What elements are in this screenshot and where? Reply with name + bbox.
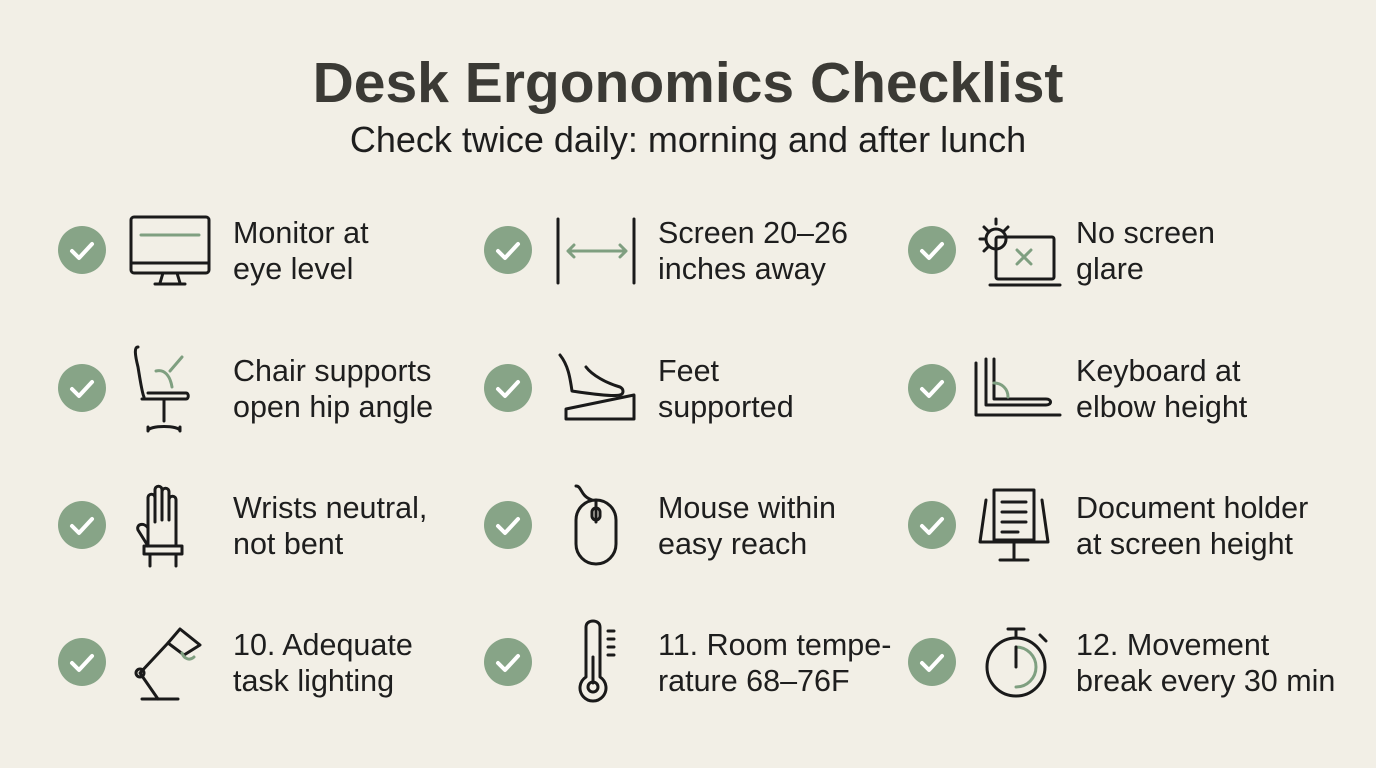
icon: chair xyxy=(134,346,190,432)
item 5: feet xyxy=(484,353,794,424)
item 7: wrist xyxy=(58,484,427,568)
check xyxy=(484,226,532,274)
item 12: timer xyxy=(908,628,1335,698)
text xyxy=(233,216,369,286)
text: Document holder xyxy=(1076,491,1308,525)
text: inches away xyxy=(658,252,826,286)
icon: stopwatch xyxy=(986,628,1048,698)
icon: hand xyxy=(136,484,184,568)
text: easy reach xyxy=(658,527,807,561)
text xyxy=(658,491,836,561)
text: rature 68–76F xyxy=(658,664,850,698)
text xyxy=(233,491,427,561)
text: supported xyxy=(658,390,794,424)
text: elbow height xyxy=(1076,390,1247,424)
subtitle: Check twice daily: morning and after lunch xyxy=(350,119,1026,160)
text: at screen height xyxy=(1076,527,1293,561)
text: Wrists neutral, xyxy=(233,491,427,525)
text: Keyboard at xyxy=(1076,354,1240,388)
item 4: chair xyxy=(58,346,433,432)
item 6: keyboard xyxy=(908,354,1247,424)
text: break every 30 min xyxy=(1076,664,1335,698)
item 9: document holder xyxy=(908,488,1308,562)
text xyxy=(658,216,848,286)
item 8: mouse xyxy=(484,484,836,566)
text: Screen 20–26 xyxy=(658,216,848,250)
text: Chair supports xyxy=(233,354,431,388)
text: 12. Movement xyxy=(1076,628,1269,662)
check xyxy=(908,226,956,274)
text xyxy=(1076,491,1308,561)
text xyxy=(233,628,413,698)
check xyxy=(58,226,106,274)
text: Mouse within xyxy=(658,491,836,525)
check xyxy=(484,638,532,686)
icon: mouse xyxy=(574,484,618,566)
text: No screen xyxy=(1076,216,1215,250)
icon: elbow xyxy=(974,358,1062,416)
check xyxy=(58,501,106,549)
item 10: lamp xyxy=(58,627,413,701)
check xyxy=(484,364,532,412)
item 1: monitor xyxy=(58,216,369,286)
text: Feet xyxy=(658,354,719,388)
text: open hip angle xyxy=(233,390,433,424)
item 2: distance xyxy=(484,216,848,286)
check xyxy=(908,364,956,412)
title: Desk Ergonomics Checklist xyxy=(313,51,1063,115)
text: task lighting xyxy=(233,664,394,698)
text xyxy=(658,628,891,698)
icon: lamp xyxy=(134,627,202,701)
text xyxy=(1076,216,1215,286)
icon: distance arrow xyxy=(556,218,636,284)
text xyxy=(658,354,794,424)
text: glare xyxy=(1076,252,1144,286)
icon: monitor xyxy=(130,216,210,286)
icon: glare xyxy=(978,218,1062,286)
text xyxy=(233,354,433,424)
check xyxy=(58,364,106,412)
icon: thermometer xyxy=(578,620,616,702)
text xyxy=(1076,354,1247,424)
icon: foot rest xyxy=(558,353,636,420)
check xyxy=(908,638,956,686)
text: eye level xyxy=(233,252,353,286)
icon: document holder xyxy=(978,488,1050,562)
item 11: thermometer xyxy=(484,620,891,702)
text: not bent xyxy=(233,527,343,561)
check xyxy=(58,638,106,686)
text: 11. Room tempe- xyxy=(658,628,891,662)
text xyxy=(1076,628,1335,698)
check xyxy=(908,501,956,549)
text: 10. Adequate xyxy=(233,628,413,662)
check xyxy=(484,501,532,549)
item 3: glare xyxy=(908,216,1215,286)
text: Monitor at xyxy=(233,216,369,250)
